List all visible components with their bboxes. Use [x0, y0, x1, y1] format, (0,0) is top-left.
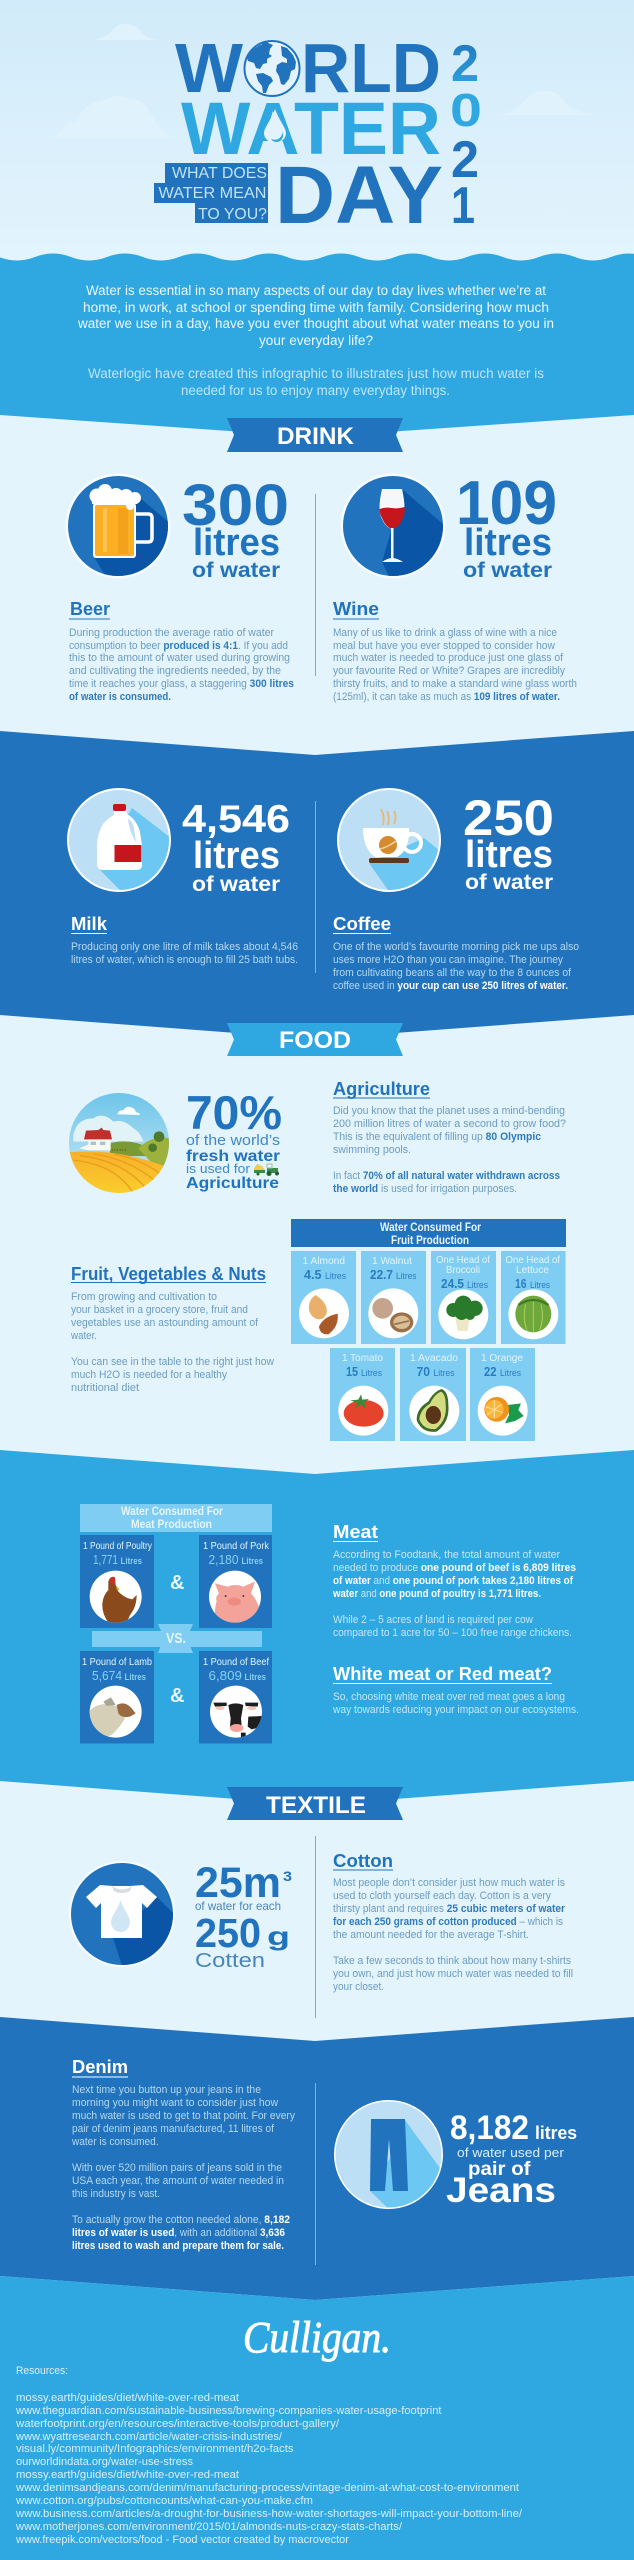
resources: mossy.earth/guides/diet/white-over-red-meat	[16, 2392, 239, 2404]
icon: coffee cup	[337, 788, 441, 892]
heading: agriculture: Agriculture	[333, 1078, 430, 1099]
text: wine: Many of us like to drink a glass of wine with a nice	[333, 627, 557, 639]
cell: lettuce	[501, 1251, 566, 1344]
cell: almond: 4.5	[304, 1267, 322, 1282]
panel: cotton text: used to cloth yourself each day. Cotton is a very	[333, 1890, 552, 1902]
cell: orange: 1 Orange	[481, 1352, 523, 1364]
subtitle box	[154, 163, 268, 223]
title	[154, 29, 482, 241]
panel: denim text	[71, 2056, 296, 2252]
cell: walnut: 22.7	[370, 1267, 393, 1282]
stat: 25 cubic metres per 250g cotton: 250	[195, 1910, 261, 1956]
heading: coffee: Coffee	[333, 913, 391, 934]
stat: 25 cubic metres per 250g cotton: Cotten	[195, 1950, 265, 1972]
text: coffee: coffee used in your cup can use 250 litres of water.	[333, 980, 568, 992]
cell: broccoli: 24.5	[441, 1276, 464, 1291]
panel: denim text: litres used to wash and prepare them for sale.	[72, 2240, 284, 2252]
stat: 4,546 litres	[182, 798, 290, 896]
background: sky	[0, 0, 634, 262]
icon: water drop	[264, 109, 286, 143]
text: beer: and cultivating the ingredients needed, by the	[69, 665, 281, 677]
stat: 25 cubic metres per 250g cotton: 3	[283, 1868, 292, 1884]
cell: tomato: 15	[346, 1364, 358, 1379]
panel: cotton text: for each 250 grams of cotton produced – which is	[333, 1916, 564, 1928]
stat: 4,546 litres: litres	[193, 835, 280, 877]
cell: lettuce: One Head of	[506, 1254, 560, 1266]
stat: 300 litres: 300	[182, 473, 289, 538]
year 2021: 2	[451, 131, 479, 189]
stat: 8,182 litres jeans: Jeans	[446, 2171, 556, 2210]
stat: 4,546 litres: of water	[192, 873, 280, 896]
intro text: home, in work, at school or spending time with family. Considering how much	[83, 300, 549, 315]
panel: denim text: pair of denim jeans manufactured, 11 litres of	[72, 2123, 275, 2135]
panel: cotton text: your closet.	[333, 1981, 384, 1993]
intro text: Water is essential in so many aspects of our day to day lives whether we’re at	[86, 283, 546, 298]
stat: 109 litres: 109	[456, 469, 557, 538]
cell: orange	[470, 1348, 535, 1441]
cell: walnut	[361, 1251, 426, 1344]
resources: www.cotton.org/pubs/cottoncounts/what-can-you-make.cfm	[15, 2495, 313, 2507]
panel: cotton text	[333, 1850, 573, 1993]
divider: denim	[315, 2083, 316, 2265]
stat: 300 litres: litres	[193, 522, 280, 564]
panel: agriculture text: swimming pools.	[333, 1144, 411, 1156]
table header: Meat Production	[131, 1519, 212, 1531]
stat: 8,182 litres jeans: litres	[535, 2123, 577, 2143]
icon: wine glass	[340, 474, 446, 578]
cell: lamb: 5,674	[92, 1668, 122, 1683]
intro text: Waterlogic have created this infographic to illustrates just how much water is	[88, 366, 544, 381]
banner: textile	[227, 1787, 403, 1820]
panel: denim text: To actually grow the cotton needed alone, 8,182	[72, 2214, 290, 2226]
resources: www.motherjones.com/environment/2015/01/almonds-nuts-crazy-stats-charts/	[15, 2521, 402, 2533]
cell: almond: Litres	[325, 1271, 346, 1281]
cell: tomato: 1 Tomato	[342, 1352, 383, 1364]
cell: walnut: 1 Walnut	[372, 1255, 412, 1267]
panel: denim text: Next time you button up your jeans in the	[72, 2084, 261, 2096]
cell: avocado: 1 Avacado	[410, 1352, 458, 1364]
panel: milk	[67, 788, 298, 966]
cell: beef: 6,809	[208, 1668, 242, 1683]
cell: tomato: Litres	[361, 1368, 382, 1378]
resources: Resources:	[16, 2365, 68, 2377]
panel: cotton text: you own, and just how much water was needed to fill	[333, 1968, 573, 1980]
panel: meat text: needed to produce one pound of beef is 6,809 litres	[333, 1562, 576, 1574]
text: milk: litres of water, which is enough to fill 25 bath tubs.	[71, 954, 298, 966]
panel: fruit text: nutritional diet	[71, 1382, 139, 1394]
cell: lettuce: 16	[515, 1276, 526, 1291]
title: RLD	[301, 29, 441, 107]
year 2021: 0	[450, 84, 482, 136]
background: clouds	[40, 24, 598, 213]
cell: orange: 22	[484, 1364, 496, 1379]
cell: beef: 1 Pound of Beef	[203, 1656, 269, 1668]
stat: 70 percent: is used for	[186, 1162, 250, 1176]
intro text: water we use in a day, have you ever thought about what water means to you in	[77, 316, 554, 331]
text: coffee: from cultivating beans all the way to the 8 ounces of	[333, 967, 572, 979]
heading: denim: Denim	[72, 2056, 128, 2077]
panel: meat text: way towards reducing your impact on our ecosystems.	[332, 1704, 579, 1716]
section background: meat	[0, 1450, 634, 1805]
panel: meat text: According to Foodtank, the total amount of water	[333, 1549, 560, 1561]
table header	[80, 1504, 272, 1532]
cell: beef	[199, 1651, 272, 1744]
panel: fruit text: From growing and cultivation to	[71, 1291, 217, 1303]
icon: jeans	[334, 2100, 445, 2215]
panel: denim text: morning you might want to consider just how	[72, 2097, 278, 2109]
table header: Water Consumed For	[380, 1222, 481, 1234]
table header: Fruit Production	[391, 1235, 469, 1247]
ampersand: &	[170, 1685, 184, 1707]
icon: farm	[67, 1092, 172, 1197]
heading: white or red meat: White meat or Red meat?	[333, 1663, 552, 1684]
versus band	[92, 1624, 262, 1653]
panel: fruit text	[70, 1263, 274, 1394]
heading: meat: Meat	[333, 1521, 378, 1542]
cell: pork: 2,180	[208, 1552, 238, 1567]
panel: denim text: water is consumed.	[71, 2136, 158, 2148]
cell: poultry	[80, 1535, 154, 1628]
text: beer: this to the amount of water used during growing	[69, 652, 290, 664]
panel: fruit text: much H2O is needed for a healthy	[71, 1369, 228, 1381]
panel: fruit text: vegetables use an astounding amount of	[71, 1317, 259, 1329]
cell: lettuce: Lettuce	[516, 1264, 549, 1276]
resources: www.freepik.com/vectors/food - Food vector created by macrovector	[15, 2534, 349, 2546]
section background: denim	[0, 2017, 634, 2300]
icon: milk jug	[67, 788, 171, 892]
panel: beer	[66, 473, 294, 703]
cell: lamb: 1 Pound of Lamb	[82, 1656, 152, 1668]
stat: 250 litres: 250	[463, 790, 554, 846]
resources: waterfootprint.org/en/resources/interactive-tools/product-gallery/	[15, 2418, 339, 2430]
cell: avocado	[400, 1348, 466, 1441]
cell: poultry: 1 Pound of Poultry	[83, 1540, 153, 1552]
resources: ourworldindata.org/water-use-stress	[16, 2456, 194, 2468]
panel: meat text: So, choosing white meat over red meat goes a long	[333, 1691, 565, 1703]
cell: poultry: Litres	[120, 1556, 142, 1566]
icon: t-shirt	[69, 1861, 175, 1967]
panel: cotton text: the amount needed for the average T-shirt.	[333, 1929, 529, 1941]
panel: fruit text: You can see in the table to the right just how	[71, 1356, 274, 1368]
cell: orange: Litres	[500, 1368, 521, 1378]
cell: pork: 1 Pound of Pork	[203, 1540, 270, 1552]
cell: broccoli: Litres	[467, 1280, 488, 1290]
cell: lettuce: Litres	[530, 1280, 550, 1290]
icon: beer mug	[66, 474, 170, 578]
year 2021	[450, 35, 482, 235]
divider: drink bottom	[315, 801, 316, 973]
cell: broccoli: One Head of	[436, 1254, 490, 1266]
text: wine	[333, 627, 577, 703]
text: wine: thirsty fruits, and to make a standard wine glass worth	[333, 678, 577, 690]
text: wine: (125ml), it can take as much as 109 litres of water.	[333, 691, 560, 703]
text: beer	[69, 627, 294, 703]
heading: fruit: Fruit, Vegetables & Nuts	[71, 1263, 266, 1284]
section background: footer	[0, 2276, 634, 2560]
text: coffee: One of the world’s favourite morning pick me ups also	[333, 941, 579, 953]
ampersand: &	[170, 1572, 184, 1594]
cell: broccoli	[431, 1251, 496, 1344]
text: wine: meal but have you ever stopped to consider how	[333, 640, 555, 652]
stat: 8,182 litres jeans: pair of	[468, 2159, 531, 2180]
subtitle box: WHAT DOES	[172, 165, 267, 182]
section background: intro water	[0, 254, 634, 437]
stat: 70 percent: 70%	[186, 1086, 282, 1139]
panel: denim text: this industry is vast.	[72, 2188, 160, 2200]
stat: 8,182 litres jeans: 8,182	[450, 2109, 529, 2147]
cell: almond: 1 Almond	[302, 1255, 345, 1267]
stat: 70 percent: of the world’s	[186, 1133, 280, 1149]
stat: 250 litres	[463, 790, 554, 894]
panel: meat text: compared to 1 acre for 50 – 100 free range chickens.	[333, 1627, 572, 1639]
stat: 300 litres: of water	[192, 559, 280, 582]
resources	[15, 2365, 522, 2546]
stat: 109 litres: of water	[463, 559, 552, 582]
panel: denim text: litres of water is used, with an additional 3,636	[72, 2227, 285, 2239]
panel: agriculture text: Did you know that the planet uses a mind-bending	[333, 1105, 565, 1117]
resources: www.wyattresearch.com/article/water-crisis-industries/	[15, 2431, 282, 2443]
panel: agriculture text: 200 million litres of water a second to grow food?	[333, 1118, 566, 1130]
cell: lamb	[80, 1651, 154, 1744]
stat: 25 cubic metres per 250g cotton	[195, 1859, 292, 1972]
panel: meat text	[332, 1521, 579, 1716]
year 2021: 1	[451, 177, 475, 235]
resources: www.theguardian.com/sustainable-business/brewing-companies-water-usage-footprint	[15, 2405, 441, 2417]
cell: pork: Litres	[242, 1556, 263, 1566]
text: beer: time it reaches your glass, a staggering 300 litres	[69, 678, 294, 690]
cell: beef: Litres	[244, 1672, 266, 1682]
divider: textile	[315, 1836, 316, 2018]
stat: 8,182 litres jeans	[446, 2109, 577, 2210]
chart: fruit production table	[291, 1219, 566, 1441]
subtitle box: WATER MEAN	[158, 185, 266, 202]
stat: 4,546 litres: 4,546	[182, 798, 290, 841]
logo: Culligan: Culligan.	[243, 2313, 391, 2362]
panel: cotton text: Most people don’t consider just how much water is	[333, 1877, 566, 1889]
year 2021: 2	[451, 35, 479, 93]
intro text: needed for us to enjoy many everyday things.	[181, 383, 450, 398]
heading: milk: Milk	[71, 913, 108, 934]
text: milk	[71, 941, 298, 966]
panel: agriculture text: In fact 70% of all natural water withdrawn across	[333, 1170, 560, 1182]
cell: poultry: 1,771	[93, 1552, 118, 1567]
title: DAY	[275, 150, 443, 241]
text: coffee: uses more H2O than you can imagine. The journey	[333, 954, 564, 966]
heading: cotton: Cotton	[333, 1850, 393, 1871]
text: milk: Producing only one litre of milk takes about 4,546	[71, 941, 298, 953]
stat: 300 litres	[182, 473, 289, 582]
stat: 70 percent: Agriculture	[186, 1175, 279, 1192]
text: wine: your favourite Red or White? Grapes are incredibly	[333, 665, 566, 677]
panel: agriculture text: the world is used for irrigation purposes.	[333, 1183, 517, 1195]
stat: 8,182 litres jeans: of water used per	[457, 2145, 565, 2160]
stat: 70 percent	[186, 1086, 282, 1192]
banner: drink	[227, 418, 403, 452]
chart: meat production table	[80, 1504, 272, 1744]
versus band: VS.	[166, 1631, 186, 1647]
cell: pork	[199, 1535, 272, 1628]
panel: denim text: With over 520 million pairs of jeans sold in the	[72, 2162, 282, 2174]
text: beer: consumption to beer produced is 4:1. If you add	[69, 640, 288, 652]
text: wine: much water is needed to produce just one glass of	[333, 652, 564, 664]
panel: meat text: water and one pound of poultry is 1,771 litres.	[332, 1588, 541, 1600]
panel: agriculture text: This is the equivalent of filling up 80 Olympic	[333, 1131, 541, 1143]
text: coffee	[333, 941, 579, 992]
icon: tractor	[254, 1164, 279, 1176]
banner: food: FOOD	[279, 1027, 351, 1054]
panel: meat text: While 2 – 5 acres of land is required per cow	[333, 1614, 533, 1626]
title: W	[175, 29, 243, 107]
intro text	[77, 283, 554, 398]
divider: drink top	[315, 494, 316, 676]
resources: visual.ly/community/Infographics/environment/h2o-facts	[16, 2443, 294, 2455]
title: WATER	[181, 87, 441, 170]
stat: 25 cubic metres per 250g cotton: g	[267, 1921, 290, 1951]
panel: fruit text: water.	[70, 1330, 97, 1342]
banner: textile: TEXTILE	[266, 1792, 366, 1819]
cell: walnut: Litres	[396, 1271, 417, 1281]
banner: food	[227, 1023, 403, 1056]
text: beer: During production the average ratio of water	[69, 627, 274, 639]
cell: avocado: Litres	[434, 1368, 455, 1378]
cell: avocado: 70	[416, 1364, 430, 1379]
stat: 109 litres	[456, 469, 557, 582]
panel: cotton text: thirsty plant and requires 25 cubic meters of water	[333, 1903, 566, 1915]
resources: mossy.earth/guides/diet/white-over-red-meat	[16, 2469, 239, 2481]
heading: beer: Beer	[70, 598, 110, 619]
table header	[291, 1219, 566, 1247]
cell: almond	[291, 1251, 356, 1344]
stat: 250 litres: litres	[465, 834, 553, 876]
cell: lamb: Litres	[124, 1672, 146, 1682]
cell: broccoli: Broccoli	[446, 1264, 480, 1276]
heading: wine: Wine	[333, 598, 379, 619]
panel: coffee	[333, 788, 579, 992]
section background: milk and coffee	[0, 731, 634, 1039]
panel: denim text: USA each year, the amount of water needed in	[72, 2175, 284, 2187]
stat: 25 cubic metres per 250g cotton: 25m	[195, 1859, 281, 1907]
text: beer: of water is consumed.	[69, 691, 171, 703]
resources: www.denimsandjeans.com/denim/manufacturing-process/vintage-denim-at-what-cost-to-environment	[15, 2482, 519, 2494]
panel: meat text: of water and one pound of pork takes 2,180 litres of	[333, 1575, 573, 1587]
banner: drink: DRINK	[277, 423, 355, 450]
subtitle box: TO YOU?	[198, 206, 267, 223]
stat: 70 percent: fresh water	[186, 1148, 280, 1165]
icon: globe	[244, 41, 300, 96]
panel: fruit text: your basket in a grocery store, fruit and	[71, 1304, 248, 1316]
intro text: your everyday life?	[259, 333, 373, 348]
panel: agriculture text	[333, 1078, 566, 1195]
resources: www.business.com/articles/a-drought-for-business-how-water-shortages-will-impact-your-bottom-line/	[15, 2508, 522, 2520]
table header: Water Consumed For	[121, 1506, 223, 1518]
panel: denim text: much water is used to get to that point. For every	[72, 2110, 296, 2122]
stat: 109 litres: litres	[464, 522, 552, 564]
cell: tomato	[330, 1348, 395, 1441]
panel: wine	[333, 469, 577, 703]
stat: 25 cubic metres per 250g cotton: of water for each	[195, 1899, 281, 1913]
stat: 250 litres: of water	[465, 871, 553, 894]
panel: cotton text: Take a few seconds to think about how many t-shirts	[333, 1955, 572, 1967]
